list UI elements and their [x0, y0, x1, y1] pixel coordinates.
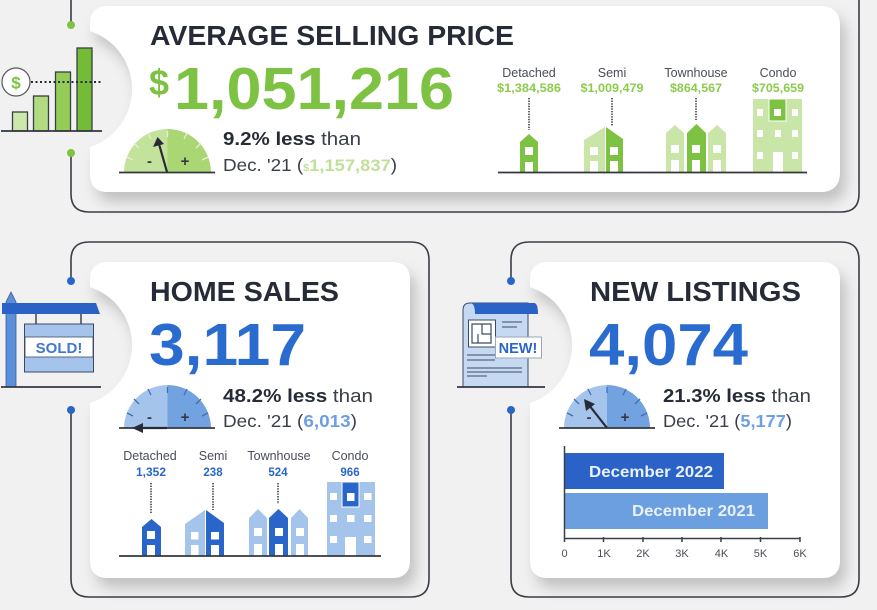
icon: condo building [327, 482, 375, 556]
comparison text: listings [663, 385, 811, 431]
connector dot: sales bottom [67, 406, 75, 414]
icon: rising bars with dollar: $ [11, 74, 21, 92]
labels: price by home type: $1,384,586 [497, 83, 561, 95]
gauge: sales change [119, 385, 215, 433]
chart axes: 1K [597, 548, 611, 560]
big number: new listings: 4,074 [589, 312, 748, 378]
panel outline: home sales [71, 242, 429, 597]
panel: new listings [457, 242, 859, 597]
labels: sales by home type: 966 [340, 467, 360, 479]
chart axes: 4K [715, 548, 729, 560]
connector dot: listings top [507, 277, 515, 285]
gauge: price change: + [181, 153, 190, 170]
labels: sales by home type: Townhouse [247, 449, 311, 463]
labels: price by home type [497, 66, 804, 95]
labels: sales by home type: 1,352 [136, 467, 166, 479]
gauge: listings change: + [621, 409, 630, 426]
bar chart: listings by year [561, 446, 807, 560]
labels: sales by home type: Detached [123, 449, 177, 463]
panel: home sales [1, 242, 429, 597]
comparison text: listings: Dec. '21 (5,177) [663, 411, 792, 431]
labels: price by home type: $864,567 [670, 83, 722, 95]
bar: December 2021: December 2021 [632, 503, 755, 520]
heading: average selling price: AVERAGE SELLING PRICE [150, 20, 514, 51]
gauge: sales change: - [147, 409, 152, 426]
icon: detached house [520, 134, 538, 172]
icon: rising bars with dollar [1, 48, 102, 131]
comparison text: price: 9.2% less than [223, 128, 361, 149]
comparison text: sales: 48.2% less than [223, 385, 373, 406]
heading: home sales: HOME SALES [150, 276, 339, 307]
labels: price by home type: Semi [598, 66, 626, 80]
gauge: price change [119, 129, 215, 172]
panel: average selling price [1, 0, 859, 212]
breakdown: sales by home type [119, 449, 381, 556]
big number: home sales: 3,117 [149, 312, 306, 378]
icon: semi house [185, 510, 224, 556]
chart axes: 0 [561, 548, 568, 560]
icon: townhouse [666, 124, 726, 172]
breakdown: price by home type [497, 66, 807, 172]
comparison text: price [223, 128, 397, 175]
panel outline: average selling price [71, 0, 859, 212]
connector dot: listings bottom [507, 406, 515, 414]
icon: detached house [142, 519, 161, 556]
heading: new listings: NEW LISTINGS [590, 276, 801, 307]
bar: December 2022: December 2022 [589, 464, 713, 481]
icon: listing document [457, 303, 545, 387]
icon: semi house [584, 127, 623, 172]
chart axes: 3K [675, 548, 689, 560]
gauge: sales change: + [181, 409, 190, 426]
icon: sold sign: SOLD! [36, 340, 82, 357]
icon: townhouse [249, 509, 308, 556]
white card: sales [90, 262, 410, 578]
panel outline: new listings [511, 242, 859, 597]
icon: listing document: NEW! [499, 341, 537, 357]
white card: price [90, 6, 840, 192]
comparison text: price: Dec. '21 ( $1,157,837 ) [223, 155, 397, 175]
labels: price by home type: Detached [502, 66, 556, 80]
bar: December 2021 [565, 493, 768, 529]
labels: price by home type: $705,659 [752, 83, 804, 95]
labels: price by home type: $1,009,479 [580, 83, 644, 95]
gauge: price change: - [147, 153, 152, 170]
labels: sales by home type [123, 449, 368, 479]
comparison text: listings: 21.3% less than [663, 385, 811, 406]
connector dot: sales top [67, 277, 75, 285]
labels: sales by home type: 238 [203, 467, 223, 479]
gauge: listings change: - [586, 409, 592, 426]
chart axes [561, 446, 807, 560]
icon: sold sign [1, 292, 101, 387]
chart axes: 6K [793, 548, 807, 560]
white card: listings [530, 262, 840, 578]
labels: price by home type: Condo [760, 66, 796, 80]
labels: sales by home type: Condo [332, 449, 368, 463]
labels: sales by home type: 524 [268, 467, 288, 479]
chart axes: 5K [754, 548, 768, 560]
icon: condo building [753, 99, 802, 172]
labels: sales by home type: Semi [199, 449, 227, 463]
gauge: listings change [559, 385, 655, 428]
chart axes: 2K [636, 548, 650, 560]
connector dot: price bottom [67, 149, 75, 157]
bar: December 2022 [565, 453, 724, 489]
labels: price by home type: Townhouse [664, 66, 728, 80]
big number: price: $ [149, 62, 169, 103]
comparison text: sales [223, 385, 373, 431]
connector dot: price top [67, 21, 75, 29]
comparison text: sales: Dec. '21 ( 6,013) [223, 411, 357, 431]
big number: price: 1,051,216 [174, 56, 454, 122]
